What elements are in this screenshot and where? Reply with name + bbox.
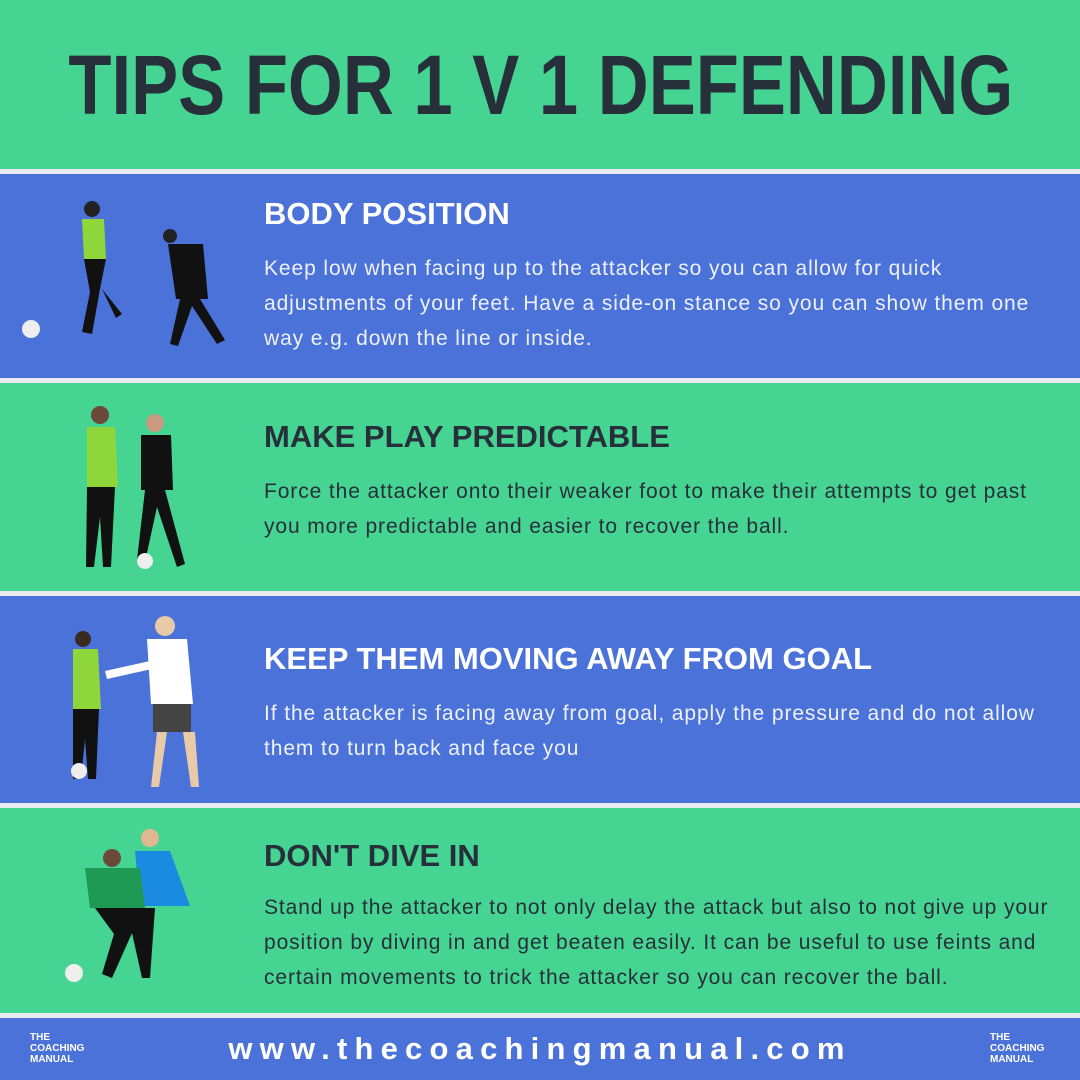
website url: www.thecoachingmanual.com	[228, 1031, 852, 1066]
text: Force the attacker onto their weaker foot to make their attempts to get past you more predictable and easier to recover the ball.	[264, 480, 1027, 538]
logo left: COACHING	[30, 1043, 84, 1054]
title band	[0, 0, 1080, 169]
footer	[0, 1018, 1080, 1080]
logo left: MANUAL	[30, 1054, 73, 1065]
players image	[86, 406, 185, 569]
logo right: COACHING	[990, 1043, 1044, 1054]
players image	[65, 829, 190, 982]
text: Keep low when facing up to the attacker so you can allow for quick adjustments of your feet. Have a side-on stance so you can show them one way e.g. down the line or inside.	[264, 257, 1029, 350]
heading: BODY POSITION	[264, 196, 510, 231]
logo right	[990, 1032, 1044, 1065]
players image	[71, 616, 199, 787]
text: If the attacker is facing away from goal, apply the pressure and do not allow them to turn back and face you	[264, 702, 1035, 760]
heading: MAKE PLAY PREDICTABLE	[264, 419, 670, 454]
panel: make play predictable	[0, 383, 1080, 591]
logo right: THE	[990, 1032, 1010, 1043]
text: Stand up the attacker to not only delay the attack but also to not give up your position by diving in and get beaten easily. It can be useful to use feints and certain movements to trick the attacker so you can recover the ball.	[264, 896, 1048, 989]
logo right: MANUAL	[990, 1054, 1033, 1065]
players image	[22, 201, 225, 346]
heading: DON'T DIVE IN	[264, 838, 480, 873]
panel: body position	[0, 174, 1080, 378]
logo left	[30, 1032, 84, 1065]
logo left: THE	[30, 1032, 50, 1043]
panel: don't dive in	[0, 808, 1080, 1013]
panel: keep them moving away from goal	[0, 596, 1080, 803]
heading: KEEP THEM MOVING AWAY FROM GOAL	[264, 641, 872, 676]
title: TIPS FOR 1 V 1 DEFENDING	[68, 38, 1013, 132]
